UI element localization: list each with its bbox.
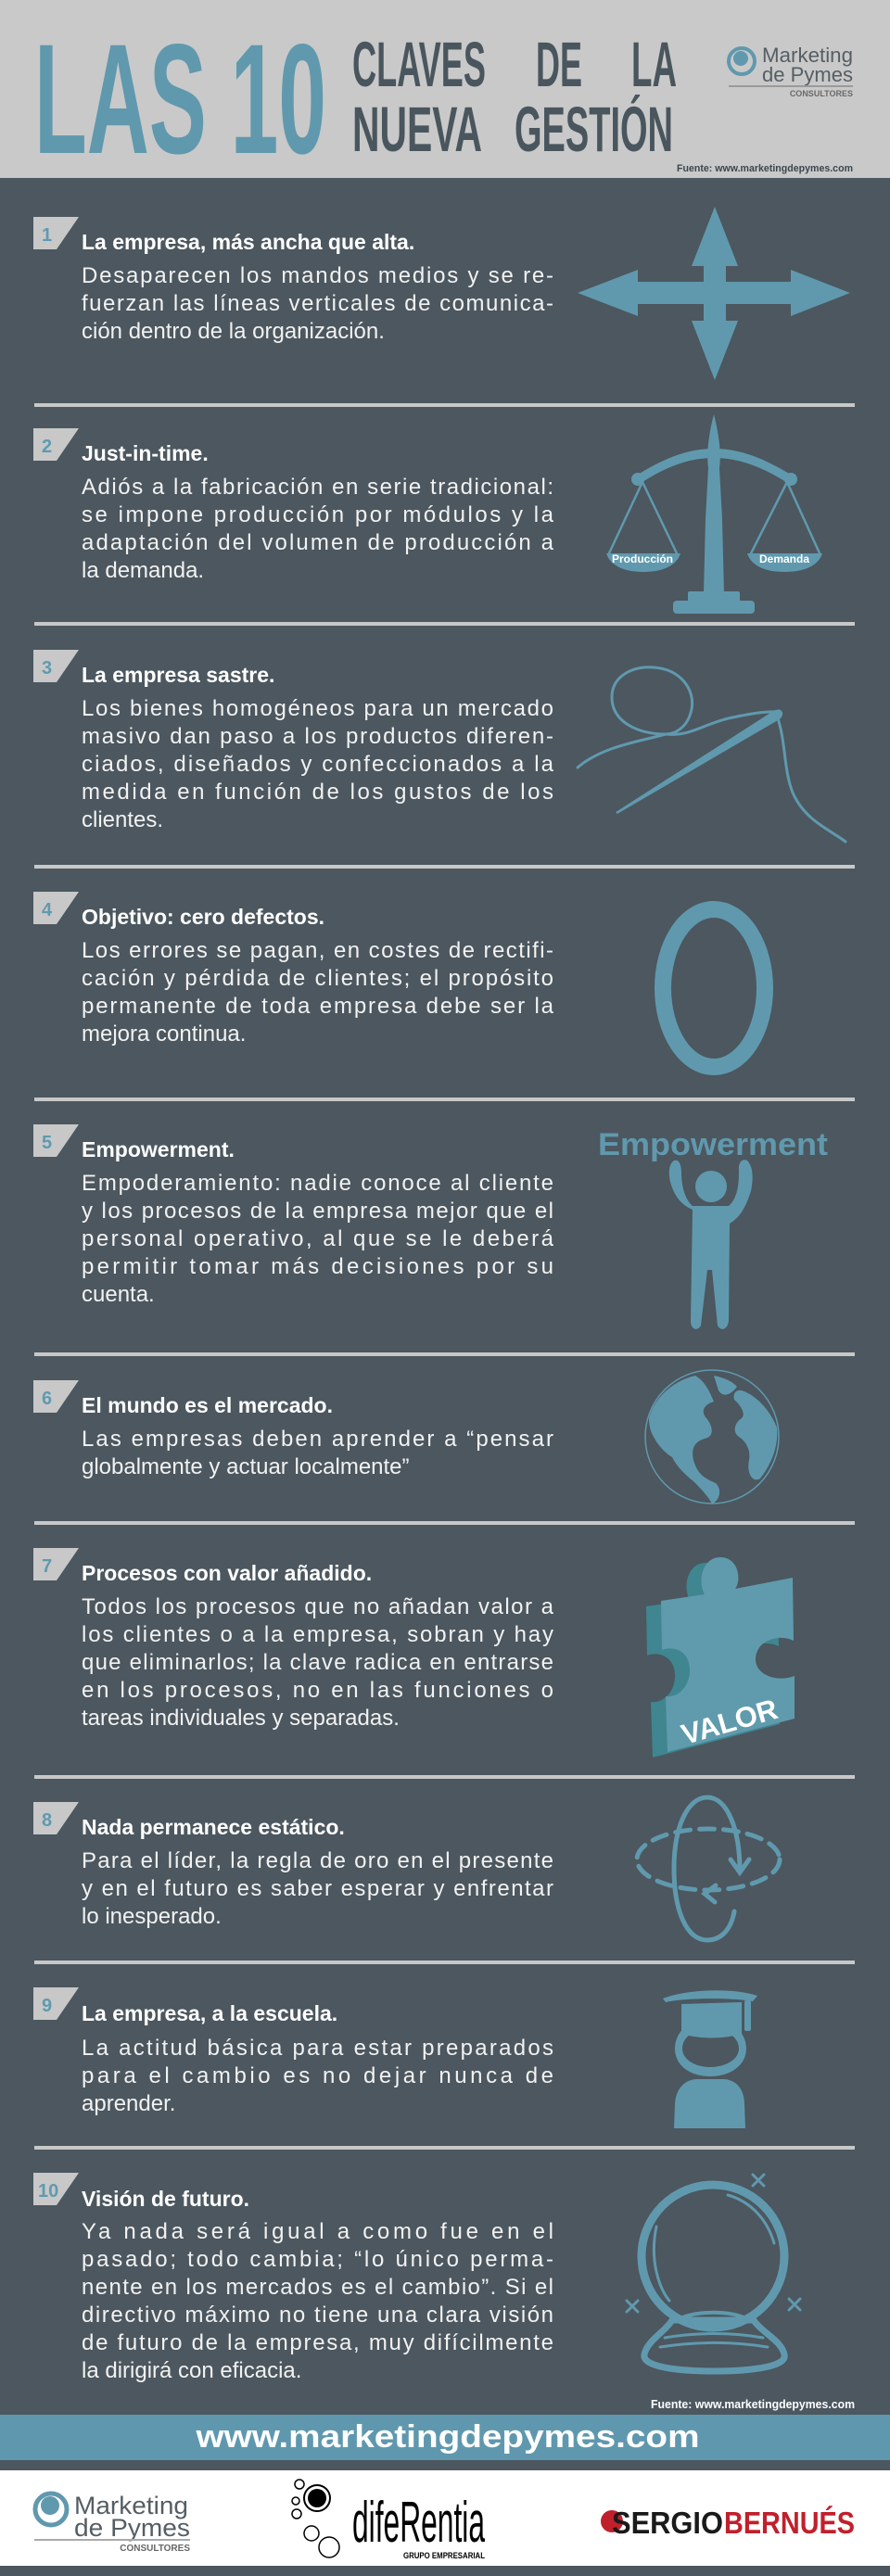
text block 1: ción dentro de la organización. <box>82 319 385 344</box>
source note: Fuente: www.marketingdepymes.com <box>677 163 853 174</box>
text block 6 <box>82 1427 553 1479</box>
number badge 4 <box>33 892 79 924</box>
icon: graduate <box>663 1990 757 2128</box>
icon: zero <box>663 909 765 1067</box>
title: claves de la nueva gestion: DE <box>536 29 582 100</box>
text block 4: cación y pérdida de clientes; el propósito <box>82 966 553 991</box>
heading 3: La empresa sastre. <box>82 663 274 687</box>
text block 2 <box>82 475 554 583</box>
heading 5: Empowerment. <box>82 1137 235 1161</box>
text block 1: Desaparecen los mandos medios y se re- <box>82 263 553 288</box>
text block 7: en los procesos, no en las funciones o <box>82 1678 553 1703</box>
text block 2: se impone producción por módulos y la <box>82 502 554 527</box>
panel: item 1 <box>33 207 850 380</box>
text block 9: La actitud básica para estar preparados <box>82 2036 553 2061</box>
number badge 7: 7 <box>42 1556 52 1577</box>
logo: marketing de pymes: CONSULTORES <box>120 2544 190 2554</box>
number badge 3 <box>33 650 79 682</box>
number badge 10 <box>33 2173 79 2205</box>
number badge 10: 10 <box>38 2181 58 2202</box>
logo: difeRentia: difeRentia <box>352 2491 485 2555</box>
logo: sergio bernues: BERNUÉS <box>724 2506 855 2540</box>
text block 10: pasado; todo cambia; “lo único perma- <box>82 2247 553 2272</box>
text block 9: para el cambio es no dejar nunca de <box>82 2063 553 2088</box>
logo: sergio bernues: SERGIO <box>612 2506 723 2540</box>
icon: empowerment figure: Empowerment <box>598 1127 828 1162</box>
number badge 4: 4 <box>42 900 53 920</box>
text block 10 <box>82 2219 553 2383</box>
title: claves de la nueva gestion: NUEVA <box>352 94 482 165</box>
banner: website: www.marketingdepymes.com <box>195 2419 700 2455</box>
text block 6: globalmente y actuar localmente” <box>82 1454 410 1479</box>
logo: marketing de pymes header <box>729 44 853 98</box>
panel: item 7 <box>33 1548 795 1758</box>
icon: needle and thread <box>578 667 846 842</box>
text block 5: personal operativo, al que se le deberá <box>82 1226 554 1251</box>
text block 8 <box>82 1848 553 1929</box>
text block 10: nente en los mercados es el cambio”. Si el <box>82 2275 553 2300</box>
title: claves de la nueva gestion <box>352 29 677 165</box>
panel: item 8 <box>33 1797 780 1940</box>
text block 7: los clientes o a la empresa, sobran y hay <box>82 1622 553 1647</box>
title: claves de la nueva gestion: LA <box>631 29 677 100</box>
panel: item 10 <box>33 2173 800 2383</box>
logo: difeRentia <box>292 2480 485 2560</box>
number badge 1 <box>33 217 79 249</box>
heading 7: Procesos con valor añadido. <box>82 1561 372 1585</box>
heading 8: Nada permanece estático. <box>82 1815 345 1839</box>
panel: item 3 <box>33 650 846 842</box>
number badge 9: 9 <box>42 1996 52 2016</box>
logo: marketing de pymes header: Marketing <box>762 44 853 67</box>
number badge 2: 2 <box>42 437 52 457</box>
text block 10: Ya nada será igual a como fue en el <box>82 2219 553 2244</box>
text block 4: Los errores se pagan, en costes de rectifi- <box>82 938 553 963</box>
number badge 7 <box>33 1548 79 1580</box>
text block 8: y en el futuro es saber esperar y enfrentar <box>82 1876 553 1901</box>
text block 10: directivo máximo no tiene una clara visión <box>82 2303 553 2328</box>
text block 9: aprender. <box>82 2091 175 2116</box>
number badge 8: 8 <box>42 1810 52 1831</box>
logo: sergio bernues <box>601 2506 855 2540</box>
text block 2: Adiós a la fabricación en serie tradicional: <box>82 475 553 500</box>
number badge 9 <box>33 1987 79 2020</box>
text block 10: la dirigirá con eficacia. <box>82 2358 301 2383</box>
logo: marketing de pymes <box>34 2492 190 2554</box>
icon: globe <box>645 1370 779 1504</box>
text block 3: Los bienes homogéneos para un mercado <box>82 696 553 721</box>
text block 4: mejora continua. <box>82 1022 246 1047</box>
logo: marketing de pymes header: de Pymes <box>762 63 853 86</box>
logo: marketing de pymes header: CONSULTORES <box>790 89 853 98</box>
text block 8: lo inesperado. <box>82 1904 222 1929</box>
banner: website <box>0 2415 890 2460</box>
heading 9: La empresa, a la escuela. <box>82 2001 337 2025</box>
title: claves de la nueva gestion: GESTIÓN <box>515 94 673 165</box>
number badge 3: 3 <box>42 658 52 679</box>
text block 2: la demanda. <box>82 558 204 583</box>
logo: marketing de pymes: Marketing <box>74 2492 188 2519</box>
text block 5: cuenta. <box>82 1282 155 1307</box>
text block 5: permitir tomar más decisiones por su <box>82 1254 553 1279</box>
panel: item 2 <box>33 414 822 614</box>
text block 3: medida en función de los gustos de los <box>82 780 553 805</box>
text block 5: Empoderamiento: nadie conoce al cliente <box>82 1171 553 1196</box>
text block 2: adaptación del volumen de producción a <box>82 530 554 555</box>
text block 6: Las empresas deben aprender a “pensar <box>82 1427 553 1452</box>
icon: rotation arrows <box>637 1797 780 1940</box>
text block 7: tareas individuales y separadas. <box>82 1706 400 1731</box>
number badge 1: 1 <box>42 225 52 246</box>
heading 10: Visión de futuro. <box>82 2187 249 2211</box>
text block 5: y los procesos de la empresa mejor que el <box>82 1199 553 1224</box>
panel: item 9 <box>33 1987 757 2128</box>
number badge 2 <box>33 428 79 461</box>
footer logos <box>0 2470 890 2566</box>
text block 3: clientes. <box>82 807 163 832</box>
icon: balance scale <box>606 414 822 614</box>
text block 3: masivo dan paso a los productos diferen- <box>82 724 553 749</box>
panel: item 4 <box>33 892 765 1067</box>
text block 10: de futuro de la empresa, muy difícilmente <box>82 2330 553 2355</box>
icon: crystal ball <box>627 2175 800 2371</box>
icon: puzzle piece VALOR <box>646 1557 795 1758</box>
text block 8: Para el líder, la regla de oro en el presente <box>82 1848 553 1873</box>
text block 9 <box>82 2036 553 2116</box>
number badge 5 <box>33 1124 79 1157</box>
icon: puzzle piece VALOR: VALOR <box>678 1693 782 1751</box>
text block 7: Todos los procesos que no añadan valor a <box>82 1594 554 1619</box>
title: LAS 10: LAS 10 <box>34 11 326 186</box>
number badge 8 <box>33 1802 79 1834</box>
text block 3 <box>82 696 554 832</box>
text block 7: que eliminarlos; la clave radica en entrarse <box>82 1650 553 1675</box>
icon: balance scale: Producción <box>612 552 673 565</box>
text block 5 <box>82 1171 554 1307</box>
heading 1: La empresa, más ancha que alta. <box>82 230 414 254</box>
header <box>0 0 890 186</box>
text block 1 <box>82 263 553 344</box>
panel: item 5 <box>33 1124 828 1329</box>
icon: empowerment figure <box>598 1127 828 1329</box>
heading 4: Objetivo: cero defectos. <box>82 905 324 929</box>
text block 7 <box>82 1594 554 1731</box>
icon: balance scale: Demanda <box>759 552 809 565</box>
icon: four arrows <box>578 207 850 380</box>
number badge 6 <box>33 1380 79 1413</box>
number badge 6: 6 <box>42 1389 52 1409</box>
text block 4: permanente de toda empresa debe ser la <box>82 994 554 1019</box>
number badge 5: 5 <box>42 1133 52 1153</box>
text block 4 <box>82 938 554 1047</box>
logo: difeRentia: GRUPO EMPRESARIAL <box>403 2551 485 2560</box>
text block 1: fuerzan las líneas verticales de comunica- <box>82 291 553 316</box>
text block 3: ciados, diseñados y confeccionados a la <box>82 752 554 777</box>
panel: item 6 <box>33 1370 779 1504</box>
logo: marketing de pymes: de Pymes <box>74 2514 190 2542</box>
title: claves de la nueva gestion: CLAVES <box>352 29 486 100</box>
source note bottom: Fuente: www.marketingdepymes.com <box>651 2397 855 2411</box>
heading 2: Just-in-time. <box>82 441 209 465</box>
heading 6: El mundo es el mercado. <box>82 1393 333 1417</box>
